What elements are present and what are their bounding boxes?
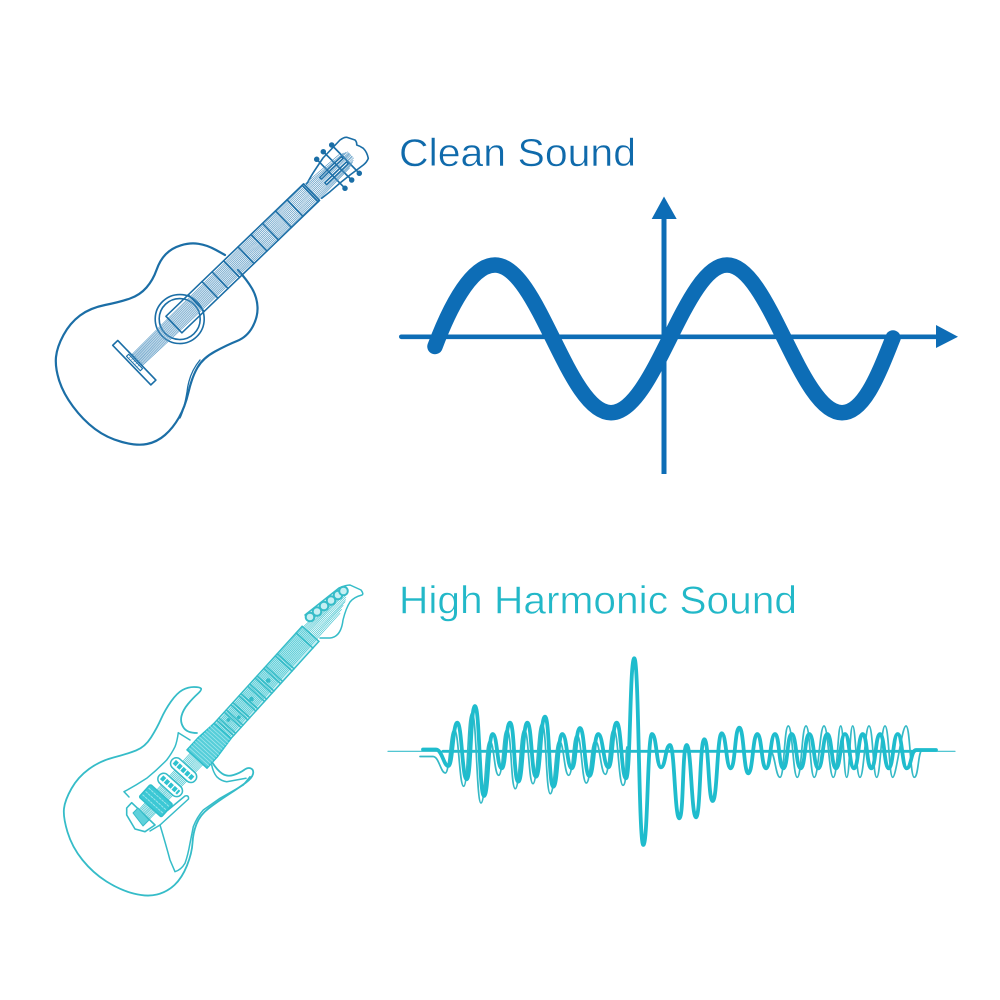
neck pickup [168, 755, 199, 785]
thick main wave [423, 658, 936, 845]
bridge [113, 339, 157, 385]
thin offset wave, first half [420, 713, 627, 803]
thin wave, second half [770, 726, 936, 777]
acoustic guitar body [56, 243, 258, 445]
icon: acoustic guitar [56, 135, 370, 445]
neck edges [205, 626, 319, 748]
frets [217, 626, 319, 736]
chart: high harmonic waveform [388, 658, 955, 845]
inlay dots [226, 676, 273, 727]
strings [127, 147, 358, 370]
heading: clean sound: Clean Sound [399, 132, 636, 175]
strings [136, 589, 351, 824]
headstock slots [320, 157, 348, 185]
middle pickup [156, 771, 185, 799]
horizontal axis with arrow [399, 325, 958, 348]
neck background [205, 626, 319, 748]
sound hole [145, 284, 214, 354]
fingerboard [166, 184, 320, 333]
icon: electric guitar [64, 584, 363, 896]
electric guitar tuners [306, 587, 348, 621]
electric guitar headstock [305, 585, 363, 638]
electric guitar body [64, 687, 253, 896]
bridge humbucker [139, 784, 173, 817]
heading: high harmonic sound: High Harmonic Sound [399, 580, 797, 622]
electric guitar bridge block [127, 803, 155, 832]
electric guitar neck, strings and hardware [130, 584, 355, 827]
sine curve [435, 265, 893, 413]
baseline [388, 750, 955, 752]
acoustic guitar headstock [307, 137, 368, 198]
frets [188, 185, 318, 311]
acoustic guitar neck, strings and bridge [113, 135, 370, 385]
electric guitar pickguard [124, 733, 250, 872]
heel block [187, 722, 233, 768]
chart: clean sine wave [399, 196, 958, 474]
vertical axis with arrow [652, 196, 677, 474]
acoustic guitar tuning pegs [315, 143, 361, 190]
electric guitar tremolo plate [150, 796, 189, 831]
acoustic guitar side line [180, 360, 200, 418]
